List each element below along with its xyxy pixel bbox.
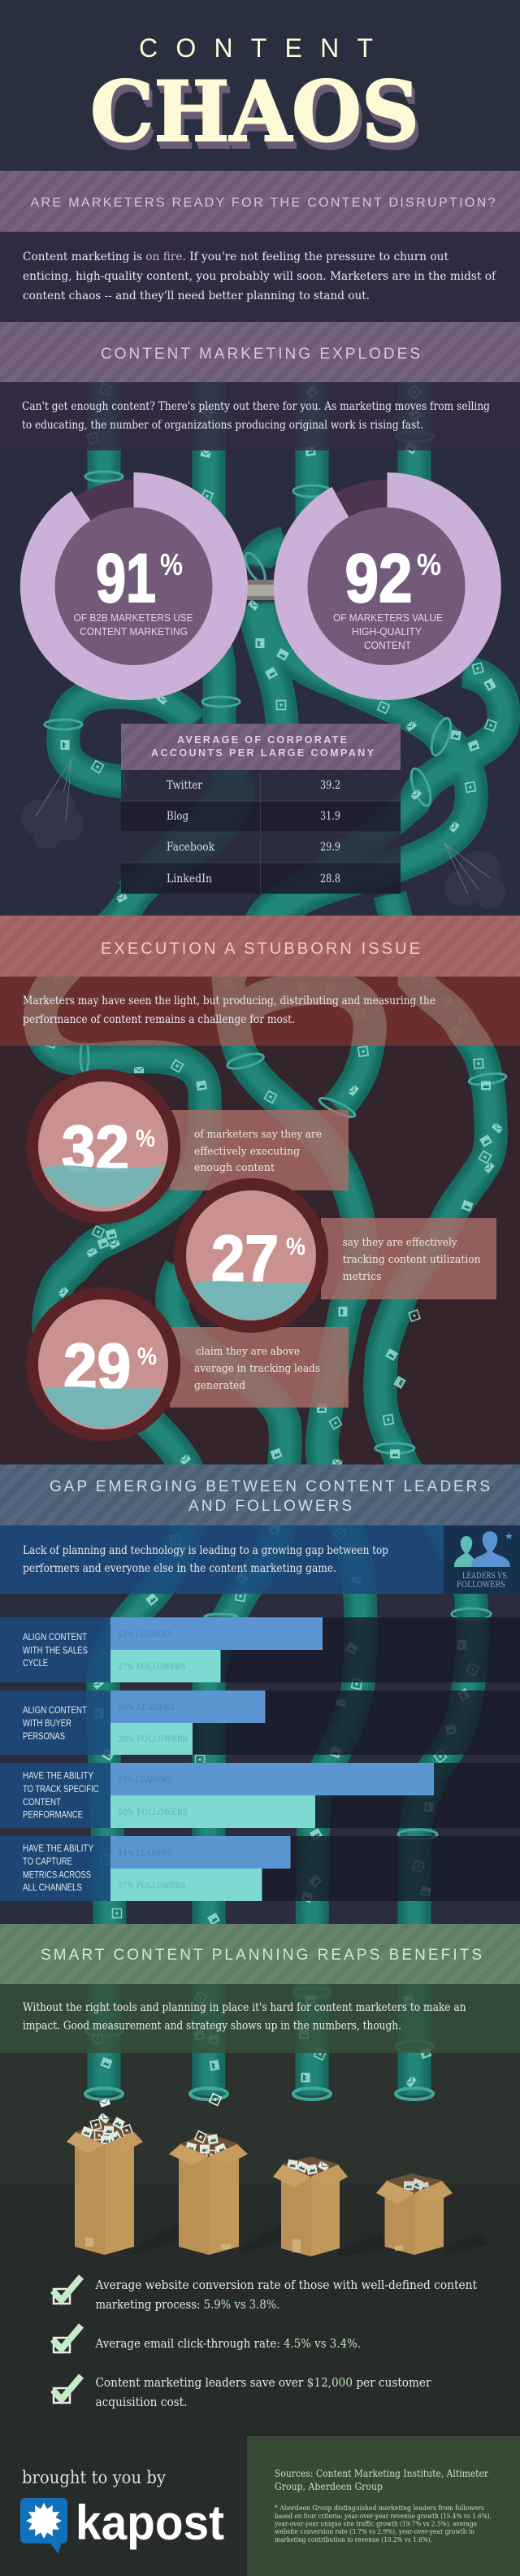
- content box 2: [169, 2131, 248, 2255]
- title: chaos: CHAOS: [93, 71, 422, 168]
- row 2: align content with buyer personas: 38% LEADERS: [118, 1704, 175, 1712]
- band: execution heading: [0, 916, 520, 977]
- smart planning paragraph panel: [0, 1984, 520, 2053]
- icon panel: leaders vs followers: FOLLOWERS: [457, 1581, 505, 1590]
- footnote: year-over-year unique site traffic growth (19.7% vs 2.5%), average: [274, 2519, 477, 2529]
- row 3: track specific content performance: 79% LEADERS: [118, 1776, 171, 1785]
- band: gap heading: GAP EMERGING BETWEEN CONTENT LEADERS: [50, 1478, 490, 1495]
- spray cloud left: [21, 790, 83, 849]
- row 2: align content with buyer personas: WITH BUYER: [23, 1719, 72, 1729]
- execution paragraph panel: Marketers may have seen the light, but producing, distributing and measuring the: [23, 994, 436, 1007]
- caption: CONTENT MARKETING: [80, 625, 188, 637]
- intro paragraph panel: Content marketing is on fire. If you're not feeling the pressure to churn out: [23, 250, 448, 263]
- table labels: 28.8: [320, 872, 340, 886]
- spray lines from pipe mouths: [36, 759, 490, 894]
- table header: ACCOUNTS PER LARGE COMPANY: [151, 747, 375, 759]
- footnote: based on four criteria: year-over-year revenue growth (15.4% vs 1.6%),: [275, 2512, 492, 2521]
- intro paragraph panel: enticing, high-quality content, you probably will soon. Marketers are in the midst of: [23, 270, 497, 283]
- explodes paragraph panel: to educating, the number of organizations producing original work is rising fast.: [22, 419, 423, 432]
- row 4: capture metrics across all channels: METRICS ACROSS: [23, 1870, 91, 1880]
- content pile 3: [287, 2160, 329, 2174]
- text box: 27 percent: tracking content utilization: [343, 1254, 481, 1266]
- row 2: align content with buyer personas: PERSONAS: [23, 1732, 65, 1742]
- text box: 29 percent: average in tracking leads: [194, 1363, 320, 1375]
- title: chaos: CHAOS: [90, 63, 419, 161]
- stat circle 29%: %: [137, 1343, 157, 1370]
- stat circle 27%: %: [286, 1234, 306, 1260]
- benefit 1: [53, 2277, 477, 2312]
- title: content: CONTENT: [139, 33, 373, 63]
- table header: [121, 724, 401, 770]
- table header: AVERAGE OF CORPORATE: [177, 734, 347, 746]
- table labels: 39.2: [320, 779, 340, 792]
- band: smart planning heading: [0, 1924, 520, 1984]
- row backgrounds: [0, 1617, 520, 1901]
- benefit 2: [53, 2326, 361, 2352]
- row 2: align content with buyer personas: ALIGN CONTENT: [23, 1706, 87, 1716]
- table labels: Blog: [167, 810, 188, 823]
- text box: 32 percent: [170, 1110, 349, 1190]
- title: chaos: CHAOS: [92, 67, 421, 165]
- smart planning paragraph panel: Without the right tools and planning in place it's hard for content marketers to make an: [23, 2001, 466, 2014]
- band: content marketing explodes heading: CONTENT MARKETING EXPLODES: [101, 346, 420, 363]
- row 4: capture metrics across all channels: 44% LEADERS: [118, 1849, 172, 1858]
- stat circle 32%: %: [136, 1125, 155, 1152]
- logo: kapost: kapost: [76, 2496, 224, 2550]
- content pile 4: [404, 2178, 430, 2192]
- intro paragraph panel: [0, 232, 520, 322]
- row 1: align content with the sales cycle: 52% LEADERS: [118, 1630, 171, 1639]
- text box: 32 percent: of marketers say they are: [194, 1129, 322, 1141]
- table labels: LinkedIn: [167, 872, 212, 886]
- stat circle 91%: [20, 472, 248, 700]
- text box: 32 percent: effectively executing: [194, 1146, 300, 1158]
- icon panel: leaders vs followers: LEADERS VS.: [462, 1572, 509, 1581]
- text box: 27 percent: [321, 1218, 496, 1299]
- number 92: 92: [344, 540, 413, 616]
- caption 2: HIGH-QUALITY: [352, 625, 422, 637]
- explodes paragraph panel: [0, 382, 520, 450]
- stat circle 29%: [26, 1287, 180, 1442]
- sources panel: Sources: Content Marketing Institute, Altimeter: [275, 2467, 488, 2479]
- table labels: Twitter: [167, 779, 202, 792]
- number 91: 91: [96, 540, 156, 616]
- icon panel: leaders vs followers: [444, 1525, 520, 1594]
- gap paragraph panel: Lack of planning and technology is leading to a growing gap between top: [23, 1544, 388, 1557]
- connector between circles: [244, 580, 278, 600]
- pipe collars: [45, 432, 507, 2100]
- row 1: align content with the sales cycle: WITH THE SALES: [23, 1646, 88, 1656]
- text box: 27 percent: say they are effectively: [343, 1237, 457, 1249]
- content box 3: [273, 2156, 348, 2256]
- benefit 1: marketing process: 5.9% vs 3.8%.: [96, 2297, 280, 2312]
- benefit 3: acquisition cost.: [96, 2395, 187, 2409]
- footnote: [274, 2504, 492, 2544]
- row 1: align content with the sales cycle: ALIGN CONTENT: [23, 1633, 87, 1643]
- brought to you by credit: [20, 2468, 224, 2554]
- stat circle 29%: 29: [63, 1330, 131, 1403]
- table rows: [121, 770, 401, 894]
- tangled content pipes: [40, 382, 504, 2095]
- execution paragraph panel: performance of content remains a challenge for most.: [23, 1013, 295, 1026]
- row 2: align content with buyer personas: [23, 1690, 265, 1755]
- stat circle 32%: [26, 1069, 180, 1224]
- spray cloud right: [445, 851, 505, 909]
- table labels: 31.9: [320, 810, 340, 823]
- row 3: track specific content performance: CONTENT: [23, 1798, 61, 1808]
- table labels: Facebook: [167, 841, 215, 854]
- content icons travelling in pipes: [46, 384, 503, 2087]
- table labels: 29.9: [320, 841, 340, 854]
- sources panel: [247, 2436, 520, 2576]
- benefit 1: Average website conversion rate of those with well-defined content: [95, 2278, 477, 2292]
- text box: 29 percent: generated: [194, 1380, 245, 1392]
- row 4: capture metrics across all channels: ALL CHANNELS: [23, 1883, 82, 1893]
- gap paragraph panel: [0, 1525, 444, 1594]
- stat circle 32%: 32: [62, 1112, 129, 1185]
- text box: 32 percent: enough content: [194, 1162, 275, 1174]
- table labels: [167, 779, 340, 886]
- band: content marketing explodes heading: [0, 322, 520, 382]
- icon: checkbox 1: [53, 2277, 81, 2304]
- benefit 2: Average email click-through rate: 4.5% vs 3.4%.: [95, 2336, 361, 2351]
- icon: leader silhouette: [471, 1531, 510, 1567]
- band: smart planning heading: SMART CONTENT PLANNING REAPS BENEFITS: [41, 1947, 482, 1964]
- row 3: track specific content performance: [23, 1763, 434, 1828]
- caption 2: CONTENT: [364, 639, 411, 651]
- footnote: * Aberdeen Group distinguished marketing leaders from followers: [275, 2504, 484, 2513]
- row 3: track specific content performance: TO TRACK SPECIFIC: [23, 1785, 99, 1795]
- percent sign: %: [160, 548, 183, 581]
- band: gap heading: [0, 1464, 520, 1525]
- hero title: [0, 0, 520, 171]
- row 2: align content with buyer personas: 20% FOLLOWERS: [118, 1735, 188, 1744]
- content box 1: [67, 2113, 143, 2255]
- row 1: align content with the sales cycle: 27% FOLLOWERS: [118, 1663, 186, 1672]
- content box 4: [376, 2174, 453, 2255]
- sources panel: Group, Aberdeen Group: [275, 2480, 383, 2492]
- band: content disruption heading: ARE MARKETERS READY FOR THE CONTENT DISRUPTION?: [31, 196, 496, 210]
- text box: 27 percent: metrics: [343, 1271, 382, 1283]
- band: execution heading: EXECUTION A STUBBORN ISSUE: [101, 940, 420, 958]
- row 4: capture metrics across all channels: TO CAPTURE: [23, 1857, 72, 1867]
- text box: 29 percent: [170, 1327, 349, 1408]
- band: gap heading: AND FOLLOWERS: [188, 1498, 352, 1515]
- row 3: track specific content performance: 50% FOLLOWERS: [118, 1808, 188, 1817]
- execution paragraph panel: [0, 977, 520, 1046]
- overflowing content pile: [80, 2113, 132, 2145]
- row 3: track specific content performance: PERFORMANCE: [23, 1811, 83, 1821]
- stat circle 92%: [274, 472, 501, 700]
- box shadows: [134, 2216, 488, 2256]
- footnote: website conversion rate (3.7% vs 2.9%), year-over-year growth in: [275, 2527, 474, 2536]
- caption 2: OF MARKETERS VALUE: [333, 611, 443, 624]
- row 1: align content with the sales cycle: [23, 1617, 323, 1682]
- footnote: marketing contribution to revenue (10.2% vs 1.6%).: [275, 2535, 432, 2544]
- falling content icons: [99, 2094, 221, 2108]
- icon: checkbox 3: [53, 2376, 81, 2403]
- caption 2: [333, 611, 443, 651]
- content pile 2: [185, 2131, 228, 2160]
- text box: 29 percent: claim they are above: [196, 1346, 300, 1358]
- smart planning paragraph panel: impact. Good measurement and strategy shows up in the numbers, though.: [23, 2020, 401, 2033]
- logo: kapost: [20, 2496, 224, 2554]
- row 4: capture metrics across all channels: [23, 1836, 291, 1901]
- caption: [74, 611, 193, 637]
- band: content disruption heading: [0, 171, 520, 232]
- row 1: align content with the sales cycle: CYCLE: [23, 1659, 48, 1669]
- row 4: capture metrics across all channels: 37% FOLLOWERS: [118, 1882, 186, 1891]
- brought to you by credit: brought to you by: [22, 2468, 166, 2487]
- benefit 3: [53, 2375, 431, 2409]
- bar chart: leaders vs followers: [0, 1617, 520, 1901]
- icon: follower silhouette: [454, 1536, 475, 1567]
- intro paragraph panel: content chaos -- and they'll need better planning to stand out.: [23, 289, 370, 302]
- row 3: track specific content performance: HAVE THE ABILITY: [23, 1772, 93, 1782]
- stat circle 27%: 27: [211, 1222, 279, 1295]
- caption: OF B2B MARKETERS USE: [74, 611, 193, 624]
- table: corporate accounts: [121, 724, 401, 894]
- benefit 3: Content marketing leaders save over $12,000 per customer: [96, 2375, 431, 2390]
- stat circle 27%: [174, 1178, 328, 1333]
- icon: checkbox 2: [53, 2326, 81, 2352]
- percent sign 2: %: [417, 548, 441, 581]
- gap paragraph panel: performers and everyone else in the content marketing game.: [23, 1562, 336, 1575]
- icon: star: [505, 1533, 513, 1539]
- row 4: capture metrics across all channels: HAVE THE ABILITY: [23, 1844, 93, 1854]
